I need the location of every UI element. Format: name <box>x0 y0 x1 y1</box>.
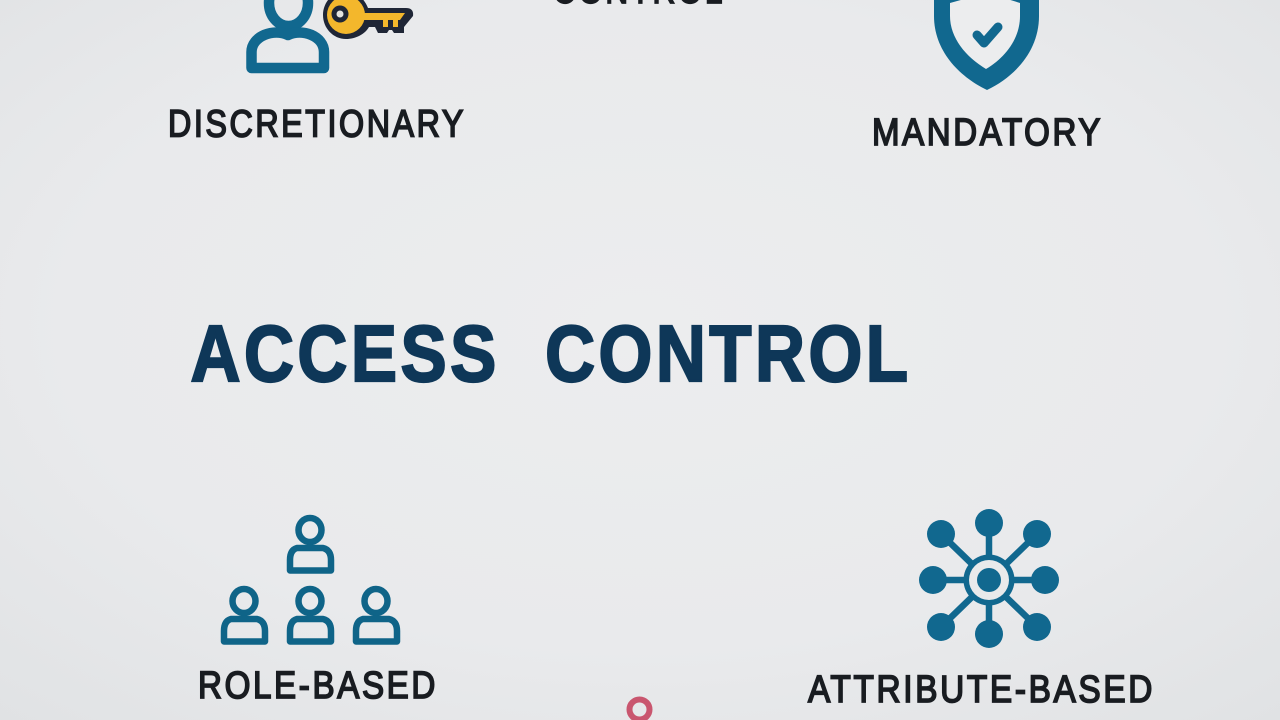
title: ACCESS CONTROL <box>190 309 912 398</box>
icon: role hierarchy <box>224 518 397 642</box>
icon: top role <box>290 518 331 570</box>
icon: shield with check <box>934 0 1039 90</box>
icon: centre role <box>290 589 331 642</box>
label: role-based: ROLE-BASED <box>198 665 438 707</box>
icon: right role <box>356 589 397 642</box>
label: discretionary: DISCRETIONARY <box>168 104 466 146</box>
icon: user with key <box>252 0 413 68</box>
icon: key <box>323 0 413 39</box>
icon: left role <box>224 589 265 642</box>
label: attribute-based: ATTRIBUTE-BASED <box>808 669 1155 711</box>
icon: user <box>252 0 324 68</box>
icon: cropped pink location ring <box>630 700 650 720</box>
icon: attribute network <box>919 509 1059 648</box>
label: mandatory: MANDATORY <box>872 112 1103 154</box>
